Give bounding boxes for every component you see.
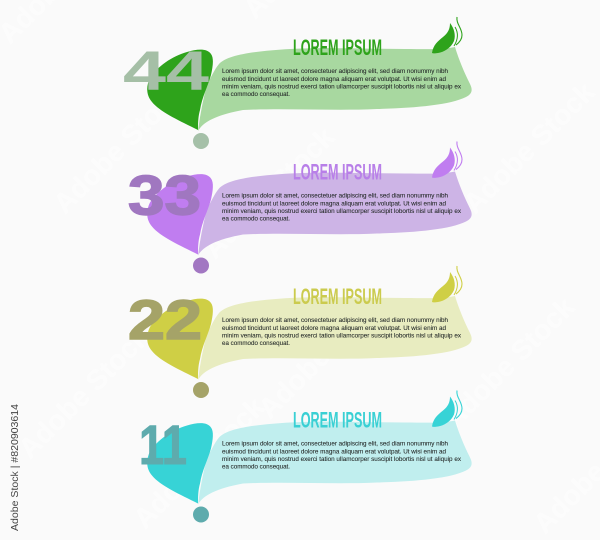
number: 22 xyxy=(128,288,202,351)
watermark pattern: Adobe Stock xyxy=(252,281,396,424)
teardrop xyxy=(147,299,213,379)
body text: euismod tincidunt ut laoreet dolore magna aliquam erat volutpat. Ut wisi enim ad xyxy=(222,200,447,208)
body text xyxy=(222,440,462,470)
teardrop xyxy=(147,50,213,130)
heading: LOREM IPSUM xyxy=(293,408,382,432)
panel: 11 xyxy=(139,390,472,522)
body text: Lorem ipsum dolor sit amet, consectetuer adipiscing elit, sed diam nonummy nibh xyxy=(222,440,449,448)
number: 44 xyxy=(123,39,209,102)
heading: LOREM IPSUM xyxy=(293,284,382,309)
teardrop xyxy=(147,423,213,504)
panel: 44 xyxy=(123,17,472,149)
body text: minim veniam, quis nostrud exerci tation ullamcorper suscipit lobortis nisl ut aliquip ex xyxy=(222,332,462,340)
icon: leaf flourish xyxy=(432,390,462,427)
body text: euismod tincidunt ut laoreet dolore magna aliquam erat volutpat. Ut wisi enim ad xyxy=(222,76,447,83)
body text: euismod tincidunt ut laoreet dolore magna aliquam erat volutpat. Ut wisi enim ad xyxy=(222,448,447,456)
dot xyxy=(193,258,209,274)
body text: Lorem ipsum dolor sit amet, consectetuer adipiscing elit, sed diam nonummy nibh xyxy=(222,68,449,75)
body text: Lorem ipsum dolor sit amet, consectetuer adipiscing elit, sed diam nonummy nibh xyxy=(222,192,449,200)
body text xyxy=(222,192,462,222)
watermark pattern: Adobe Stock xyxy=(127,391,271,534)
body text xyxy=(222,68,462,98)
banner shape xyxy=(198,172,472,256)
body text: ea commodo consequat. xyxy=(222,91,290,98)
dot xyxy=(193,382,209,398)
body text: minim veniam, quis nostrud exerci tation ullamcorper suscipit lobortis nisl ut aliquip ex xyxy=(222,456,462,463)
body text: minim veniam, quis nostrud exerci tation ullamcorper suscipit lobortis nisl ut aliquip ex xyxy=(222,84,462,90)
heading: LOREM IPSUM xyxy=(293,35,382,60)
body text: ea commodo consequat. xyxy=(222,340,290,347)
banner shape xyxy=(198,47,472,131)
watermark pattern: Adobe Stock xyxy=(47,76,191,219)
icon: leaf flourish xyxy=(432,142,462,178)
number: 33 xyxy=(128,164,201,226)
dot xyxy=(193,133,209,149)
body text: minim veniam, quis nostrud exerci tation ullamcorper suscipit lobortis nisl ut aliquip ex xyxy=(222,208,462,215)
watermark pattern: Adobe Stock xyxy=(457,76,600,219)
body text: ea commodo consequat. xyxy=(222,464,290,470)
panel: 22 xyxy=(128,266,472,398)
banner shape xyxy=(198,420,472,504)
body text: ea commodo consequat. xyxy=(222,216,290,222)
banner shape xyxy=(198,296,472,380)
watermark pattern: Adobe Stock xyxy=(12,321,156,464)
body text xyxy=(222,317,462,347)
body text: Lorem ipsum dolor sit amet, consectetuer adipiscing elit, sed diam nonummy nibh xyxy=(222,317,449,324)
stock credit text: Adobe Stock | #820903614 xyxy=(9,404,21,531)
watermark pattern: Adobe Stock xyxy=(197,121,341,264)
panel: 33 xyxy=(128,142,472,274)
icon: leaf flourish xyxy=(432,17,462,53)
heading: LOREM IPSUM xyxy=(293,160,382,184)
icon: leaf flourish xyxy=(432,266,462,302)
watermark pattern: Adobe Stock xyxy=(437,291,581,434)
teardrop xyxy=(147,174,213,254)
dot xyxy=(193,506,209,522)
body text: euismod tincidunt ut laoreet dolore magna aliquam erat volutpat. Ut wisi enim ad xyxy=(222,325,447,332)
number: 11 xyxy=(139,413,187,476)
